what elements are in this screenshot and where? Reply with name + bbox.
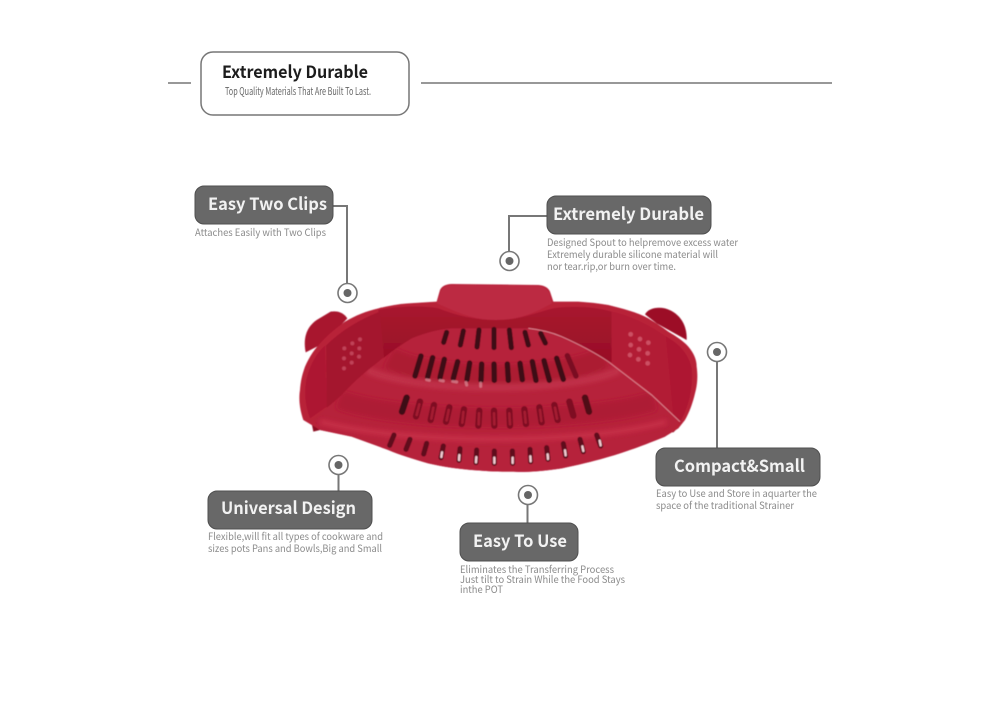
callout: Compact&Small bbox=[656, 342, 820, 512]
callout: Easy Two Clips bbox=[195, 186, 357, 302]
subheading: Top Quality Materials That Are Built To Last. bbox=[225, 84, 371, 99]
callout: Easy To Use bbox=[460, 486, 625, 596]
heading: Extremely Durable bbox=[222, 58, 368, 83]
connector bbox=[509, 216, 547, 252]
right grip dots bbox=[628, 332, 651, 366]
spout highlight bbox=[437, 285, 552, 320]
strainer body bbox=[299, 284, 697, 472]
floor ridges bbox=[320, 358, 667, 439]
header banner bbox=[168, 52, 832, 115]
description: space of the traditional Strainer bbox=[656, 497, 794, 512]
floor edge highlight bbox=[528, 328, 680, 422]
marker bbox=[518, 486, 538, 504]
description: Easy to Use and Store in aquarter the bbox=[656, 485, 817, 500]
right inner panel bbox=[612, 312, 673, 415]
right clip knob bbox=[645, 308, 687, 340]
left grip dots bbox=[342, 337, 362, 370]
description: Attaches Easily with Two Clips bbox=[195, 224, 326, 239]
description: Flexible,will fit all types of cookware and bbox=[208, 528, 383, 543]
label pill bbox=[656, 448, 820, 486]
connector bbox=[526, 504, 528, 523]
left inner panel bbox=[326, 312, 384, 408]
strainer floor bbox=[314, 328, 680, 472]
description: Just tilt to Strain While the Food Stays bbox=[460, 571, 625, 586]
marker bbox=[338, 284, 357, 302]
connector bbox=[338, 474, 340, 491]
second row slot highlights bbox=[427, 380, 481, 386]
marker bbox=[708, 342, 726, 362]
callout: Universal Design bbox=[208, 456, 383, 555]
description: Eliminates the Transferring Process bbox=[460, 561, 614, 576]
marker bbox=[500, 252, 519, 270]
label pill bbox=[195, 186, 333, 224]
description: inthe POT bbox=[460, 581, 503, 596]
top row slots bbox=[444, 329, 545, 348]
connector bbox=[716, 361, 718, 448]
description: nor tear.rip,or burn over time. bbox=[547, 258, 676, 273]
label pill bbox=[547, 196, 711, 234]
label text: Easy To Use bbox=[473, 527, 567, 552]
right wing face bbox=[666, 337, 692, 423]
description: Extremely durable silicone material will bbox=[547, 246, 718, 261]
label text: Compact&Small bbox=[674, 452, 805, 477]
description: Designed Spout to helpremove excess water bbox=[547, 234, 738, 249]
label text: Universal Design bbox=[221, 494, 356, 519]
label pill bbox=[208, 491, 372, 529]
label text: Extremely Durable bbox=[553, 200, 704, 225]
left clip knob bbox=[305, 311, 347, 352]
small feet bbox=[312, 423, 681, 432]
connector bbox=[333, 206, 347, 284]
callout: Extremely Durable bbox=[500, 196, 738, 273]
label text: Easy Two Clips bbox=[208, 190, 327, 215]
third row slots bbox=[402, 398, 589, 426]
bottom row slots bbox=[390, 435, 601, 463]
label pill bbox=[460, 523, 578, 561]
bottom row slot highlights bbox=[441, 441, 601, 463]
second row slots bbox=[415, 356, 576, 380]
back wall bbox=[378, 307, 612, 362]
marker bbox=[329, 456, 348, 474]
description: sizes pots Pans and Bowls,Big and Small bbox=[208, 540, 382, 555]
third row slot centres bbox=[417, 404, 557, 424]
red clip-on strainer bbox=[299, 284, 697, 472]
left wing face bbox=[305, 346, 327, 418]
